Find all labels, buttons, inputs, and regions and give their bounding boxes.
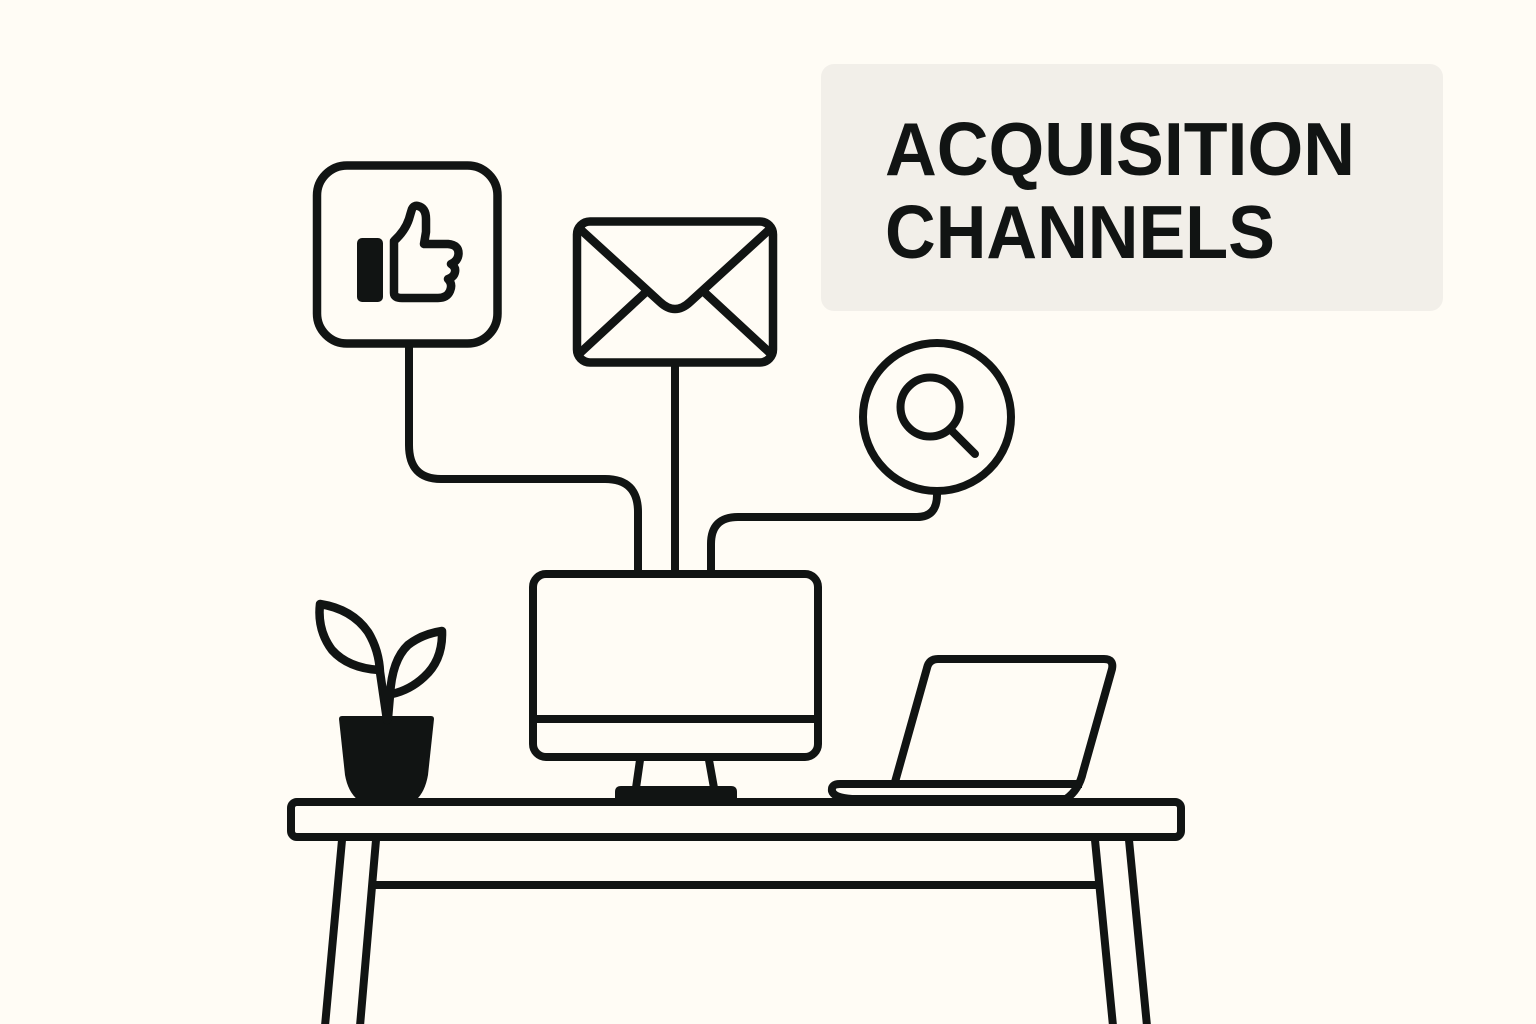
title heading: CHANNELS (885, 190, 1275, 274)
monitor stand (636, 760, 714, 788)
desk (291, 802, 1181, 1024)
desk crossbar (372, 881, 1098, 889)
icon: thumbs up in rounded square (317, 166, 498, 344)
title heading: ACQUISITION (885, 107, 1355, 191)
desk top (291, 802, 1181, 837)
icon: envelope (577, 222, 773, 362)
title panel (821, 64, 1443, 311)
icon: magnifier in circle (863, 343, 1011, 491)
laptop (832, 659, 1112, 799)
potted plant (320, 604, 442, 800)
title heading (885, 107, 1355, 274)
monitor (533, 574, 818, 800)
connector network (409, 345, 937, 572)
monitor base (615, 786, 737, 800)
desk legs (325, 840, 1147, 1024)
